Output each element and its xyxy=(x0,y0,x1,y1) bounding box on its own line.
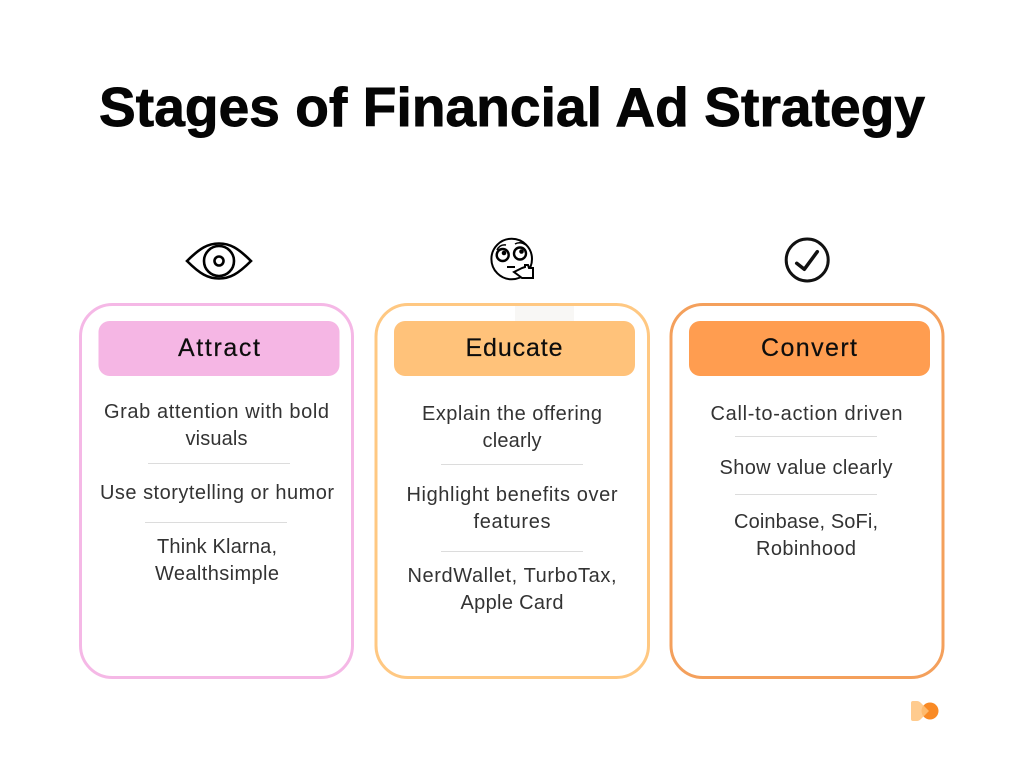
header: educate xyxy=(394,321,635,376)
icon: check circle xyxy=(786,239,828,281)
text block: attract points: Grab attention with bold xyxy=(104,401,329,423)
text block: educate points: clearly xyxy=(482,430,542,452)
text block: attract points: visuals xyxy=(186,428,248,450)
text block: educate points: NerdWallet, TurboTax, xyxy=(408,565,616,587)
panel: educate xyxy=(376,304,648,678)
icon: thinking face xyxy=(491,239,533,279)
text block: attract points: Think Klarna, xyxy=(157,536,277,558)
text block: educate points: Apple Card xyxy=(460,592,564,614)
title: Stages of Financial Ad Strategy xyxy=(99,76,925,138)
icon: logo xyxy=(911,701,938,721)
panel: convert xyxy=(671,304,943,678)
text block: educate points: Highlight benefits over xyxy=(406,484,618,506)
header: attract: Attract xyxy=(178,334,260,362)
icon: eye xyxy=(187,244,251,278)
header: convert: Convert xyxy=(761,334,857,362)
text block: educate points xyxy=(406,403,618,614)
panel: attract xyxy=(80,304,352,678)
text block: convert points: Call-to-action driven xyxy=(710,403,902,425)
header: attract xyxy=(98,321,340,376)
text block: attract points xyxy=(100,401,334,585)
text block: educate points: Explain the offering xyxy=(422,403,602,425)
text block: convert points: Robinhood xyxy=(756,538,856,560)
header: convert xyxy=(689,321,930,376)
text block: convert points: Show value clearly xyxy=(720,457,892,479)
text block: convert points: Coinbase, SoFi, xyxy=(734,511,878,533)
text block: attract points: Use storytelling or humor xyxy=(100,482,334,504)
text block: educate points: features xyxy=(474,511,550,533)
text block: convert points xyxy=(710,403,902,560)
text block: attract points: Wealthsimple xyxy=(155,563,279,585)
header: educate: Educate xyxy=(466,334,562,362)
